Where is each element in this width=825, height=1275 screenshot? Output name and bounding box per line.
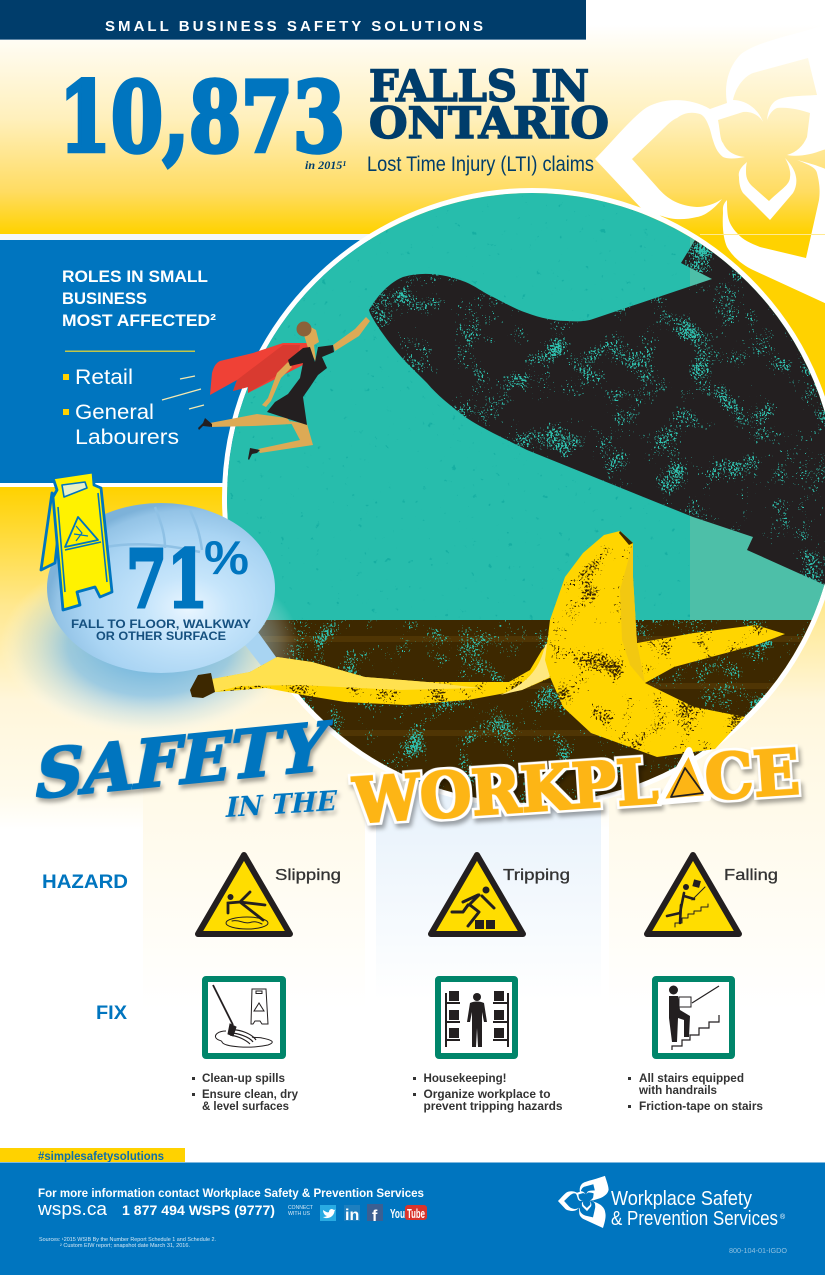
fix: tripping <box>438 979 515 1056</box>
peel inner fold <box>500 640 552 695</box>
cape shade <box>233 345 300 393</box>
giant shadow <box>369 240 825 600</box>
illustration: banana peel <box>190 531 785 757</box>
cape <box>210 343 310 395</box>
phone: 1 877 494 WSPS (9777) <box>122 1203 275 1218</box>
heading: workplace <box>350 735 802 838</box>
background gradient: header <box>0 0 825 234</box>
heading: in the: IN THE <box>225 786 337 824</box>
sources <box>39 1237 216 1249</box>
callout caption: FALL TO FLOOR, WALKWAY <box>71 617 251 631</box>
panel text: roles most affected: MOST AFFECTED² <box>62 312 217 330</box>
sign warning triangle <box>65 517 98 547</box>
percent sign: % <box>204 531 249 584</box>
dress <box>267 345 334 425</box>
bubble body <box>47 503 275 673</box>
panel text: roles most affected: General <box>75 400 154 424</box>
glow behind bubble <box>0 553 300 737</box>
pictogram: falling person <box>667 879 708 927</box>
background column: slipping <box>143 770 365 1010</box>
connect <box>288 1205 314 1217</box>
background column: tripping <box>376 790 601 1000</box>
text: falling fixes: Friction-tape on stairs <box>639 1101 763 1113</box>
connect: WITH US <box>288 1211 310 1217</box>
lighter panel <box>690 237 825 620</box>
peel main body <box>545 531 745 757</box>
hair <box>296 322 312 336</box>
sign back leg <box>41 493 62 570</box>
logo text: Workplace Safety <box>611 1188 752 1210</box>
sign handle <box>62 482 87 497</box>
hazard: slipping <box>198 855 341 934</box>
text: tripping fixes: prevent tripping hazards <box>424 1101 562 1113</box>
text: falling fixes: with handrails <box>638 1085 717 1097</box>
green frame <box>655 979 732 1056</box>
callout caption: OR OTHER SURFACE <box>96 629 226 643</box>
footer <box>0 1162 825 1275</box>
pictogram: tripping person <box>452 886 495 929</box>
background gradient: lower <box>0 234 825 834</box>
ground <box>258 620 812 803</box>
icon: large white flower logo <box>595 36 825 304</box>
heading: falls in ontario: ONTARIO <box>369 99 609 149</box>
illustration circle ring <box>224 190 825 806</box>
bubble highlights <box>100 507 202 552</box>
warning triangle <box>198 855 290 934</box>
neck and face <box>304 326 319 362</box>
peel main fold shade <box>620 543 645 683</box>
peel left arm <box>207 640 552 705</box>
hashtag tab <box>0 1148 185 1163</box>
text: falling fixes <box>628 1073 763 1113</box>
peel stem <box>190 673 215 698</box>
hazard: falling <box>647 855 778 934</box>
peel left arm highlight <box>207 657 480 692</box>
icon: linkedin: in <box>345 1207 359 1224</box>
peel right arm <box>637 625 785 690</box>
icon: facebook <box>367 1204 383 1225</box>
icon: facebook: f <box>372 1208 378 1225</box>
panel text: roles most affected: Retail <box>75 365 133 389</box>
white divider strip <box>0 234 370 240</box>
thin horizontal highlight <box>700 234 825 235</box>
band title: SMALL BUSINESS SAFETY SOLUTIONS <box>105 18 483 35</box>
icon: youtube: You <box>390 1206 405 1221</box>
statistic date: in 2015¹ <box>305 158 346 172</box>
label: fix: FIX <box>96 1003 127 1024</box>
sign markings <box>58 493 107 592</box>
hazard: tripping <box>431 855 570 934</box>
letters: WORKPL <box>350 744 660 838</box>
sources: Sources: ¹2015 WSIB By the Number Report Schedule 1 and Schedule 2. <box>39 1237 216 1243</box>
bubble pointer <box>245 632 281 672</box>
label: Falling <box>724 867 778 884</box>
pictogram: person carrying box on stairs <box>669 986 719 1050</box>
pictogram: slipping person <box>226 892 268 929</box>
statistic: 10,873: 10,873 <box>59 61 345 174</box>
warning triangle <box>647 855 739 934</box>
logo text: ® <box>780 1213 786 1221</box>
text: falling fixes: All stairs equipped <box>639 1073 744 1085</box>
text: tripping fixes: Housekeeping! <box>424 1073 506 1085</box>
statistic 71: 71 <box>126 532 208 626</box>
illustration circle <box>227 193 825 810</box>
icon: twitter <box>320 1205 336 1221</box>
contact line: For more information contact Workplace Safety & Prevention Services <box>38 1188 424 1200</box>
heading: falls in ontario <box>369 62 609 149</box>
label: Tripping <box>503 867 570 884</box>
pictogram: mop and sign <box>213 985 272 1047</box>
hashtag tab: #simplesafetysolutions <box>38 1151 164 1163</box>
callout caption <box>71 617 251 643</box>
text: slipping fixes <box>192 1073 299 1113</box>
heading: safety: SAFETY <box>36 707 333 814</box>
raised arm <box>333 317 370 351</box>
illustration: flying woman <box>198 317 370 460</box>
heading: falls in ontario: FALLS IN <box>369 62 589 112</box>
header band <box>0 0 586 40</box>
back leg <box>258 421 313 453</box>
fix: slipping <box>205 979 283 1056</box>
sign front <box>53 472 112 610</box>
sources: ² Custom EIW report; snapshot date March 31, 2016. <box>60 1243 190 1249</box>
logo text: & Prevention Services <box>611 1208 778 1230</box>
icon: wet floor sign <box>41 472 112 610</box>
pictogram: person and shelves <box>445 991 509 1047</box>
front leg <box>210 414 292 427</box>
rear arm <box>262 362 292 407</box>
speed lines <box>162 376 204 409</box>
letters end: CE <box>702 735 802 815</box>
icon: youtube <box>390 1205 427 1221</box>
panel: roles <box>0 240 370 483</box>
shoes <box>198 418 260 460</box>
panel text: roles most affected <box>62 268 217 449</box>
text: slipping fixes: Clean-up spills <box>202 1073 285 1085</box>
green frame <box>438 979 515 1056</box>
panel text: roles most affected: Labourers <box>75 425 179 449</box>
letter a under triangle: A <box>667 766 695 807</box>
icon: wsps logo <box>558 1176 609 1228</box>
text: slipping fixes: Ensure clean, dry <box>202 1089 299 1101</box>
panel text: roles most affected: BUSINESS <box>62 290 147 308</box>
teal sky <box>227 193 825 620</box>
callout bubble: 71% <box>47 503 281 673</box>
label: hazard: HAZARD <box>42 872 128 893</box>
subheading: Lost Time Injury (LTI) claims <box>367 153 594 176</box>
panel text: roles most affected: ROLES IN SMALL <box>62 268 208 286</box>
icon: triangle a <box>660 750 708 802</box>
connect: CONNECT <box>288 1205 314 1211</box>
text: tripping fixes: Organize workplace to <box>424 1089 550 1101</box>
background column: falling <box>609 770 825 1010</box>
peel tip <box>619 531 633 545</box>
warning triangle <box>431 855 523 934</box>
icon: youtube: Tube <box>407 1206 425 1221</box>
ground stripes <box>227 636 825 736</box>
fix: falling <box>655 979 732 1056</box>
green frame <box>205 979 283 1056</box>
text: slipping fixes: & level surfaces <box>202 1101 289 1113</box>
logo text <box>611 1188 786 1230</box>
white divider lower <box>0 483 230 487</box>
label: Slipping <box>275 867 341 884</box>
website: wsps.ca <box>37 1198 108 1219</box>
text: tripping fixes <box>413 1073 562 1113</box>
document code: 800-104-01-IGDO <box>729 1248 788 1255</box>
